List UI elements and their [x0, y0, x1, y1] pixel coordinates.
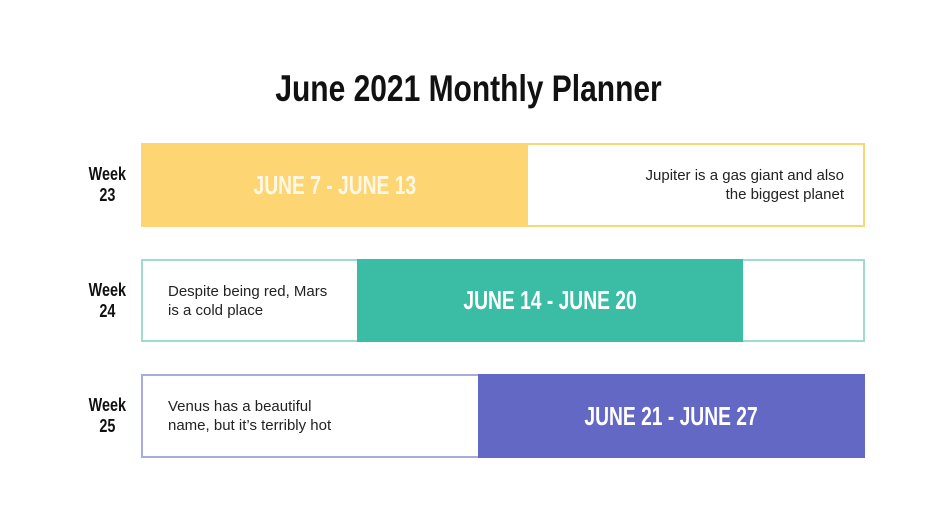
title: June 2021 Monthly Planner [275, 68, 662, 109]
week label 24: Week [89, 280, 126, 300]
note: Jupiter: Jupiter is a gas giant and also the biggest planet [646, 167, 844, 203]
row: week 25 [88, 374, 865, 458]
week label 24 [88, 280, 126, 320]
note: Venus: Venus has a beautiful name, but it’s terribly hot [168, 398, 331, 434]
panel: week 24 [141, 259, 865, 342]
week label 23: Week [89, 164, 126, 184]
week label 25: Week [89, 395, 126, 415]
week label 23 [88, 164, 126, 205]
date bar: June 21 - June 27 [478, 374, 865, 458]
row: week 24 [88, 259, 865, 342]
date bar: June 7 - June 13 [141, 143, 528, 227]
week label 23: 23 [99, 185, 115, 205]
row: week 23 [88, 143, 865, 227]
panel: week 23 [141, 143, 865, 227]
date bar: June 7 - June 13: JUNE 7 - JUNE 13 [253, 170, 416, 200]
panel: week 25 [141, 374, 865, 458]
date bar: June 14 - June 20 [357, 259, 743, 342]
week label 25 [88, 395, 126, 436]
date bar: June 14 - June 20: JUNE 14 - JUNE 20 [463, 285, 637, 315]
week label 24: 24 [99, 300, 115, 320]
note: Mars: Despite being red, Mars is a cold place [168, 283, 327, 319]
date bar: June 21 - June 27: JUNE 21 - JUNE 27 [585, 400, 758, 430]
week label 25: 25 [99, 416, 115, 436]
